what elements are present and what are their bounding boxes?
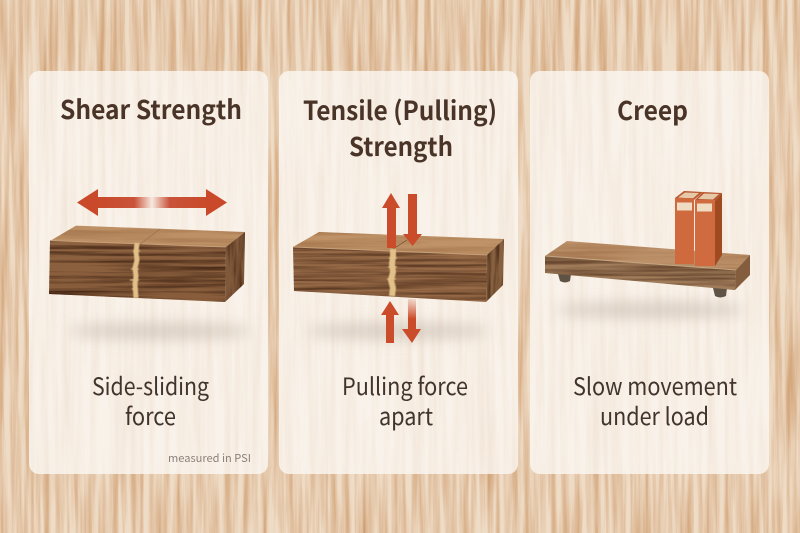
icon: two books — [675, 191, 722, 266]
heading: shear strength: Shear Strength — [60, 90, 242, 127]
icon: double-headed shear arrow — [77, 189, 227, 216]
description: shear — [92, 367, 209, 432]
shear crack fibres — [130, 243, 140, 298]
heading: creep: Creep — [617, 91, 688, 128]
description: tensile — [342, 367, 468, 432]
panel: tensile strength — [279, 71, 518, 474]
description: shear: force — [125, 397, 176, 432]
book one — [675, 191, 703, 264]
shadow under block — [68, 323, 252, 339]
panel: creep — [530, 71, 769, 474]
panel: shear strength — [29, 71, 268, 474]
icon: shelf feet — [558, 274, 727, 298]
description: tensile: Pulling force — [342, 367, 468, 402]
heading: tensile strength: Tensile (Pulling) — [303, 91, 497, 128]
icon: lower arrows — [381, 299, 421, 343]
icon: upper arrows — [382, 193, 422, 248]
description: shear: Side-sliding — [92, 367, 209, 402]
heading: tensile strength: Strength — [349, 127, 453, 164]
heading: tensile strength — [303, 91, 497, 164]
description: creep: under load — [600, 397, 709, 432]
illustration: wood block with shear crack — [49, 226, 245, 302]
shadow under block — [306, 323, 490, 339]
description: creep — [573, 367, 737, 432]
illustration: wood block with crack — [293, 232, 504, 302]
shadow under shelf — [555, 302, 745, 318]
note: measured in PSI: measured in PSI — [168, 450, 251, 466]
illustration: sagging plank shelf — [545, 241, 750, 290]
description: tensile: apart — [379, 397, 433, 432]
tensile crack fibres — [387, 249, 397, 296]
book two — [695, 192, 722, 266]
description: creep: Slow movement — [573, 367, 737, 402]
